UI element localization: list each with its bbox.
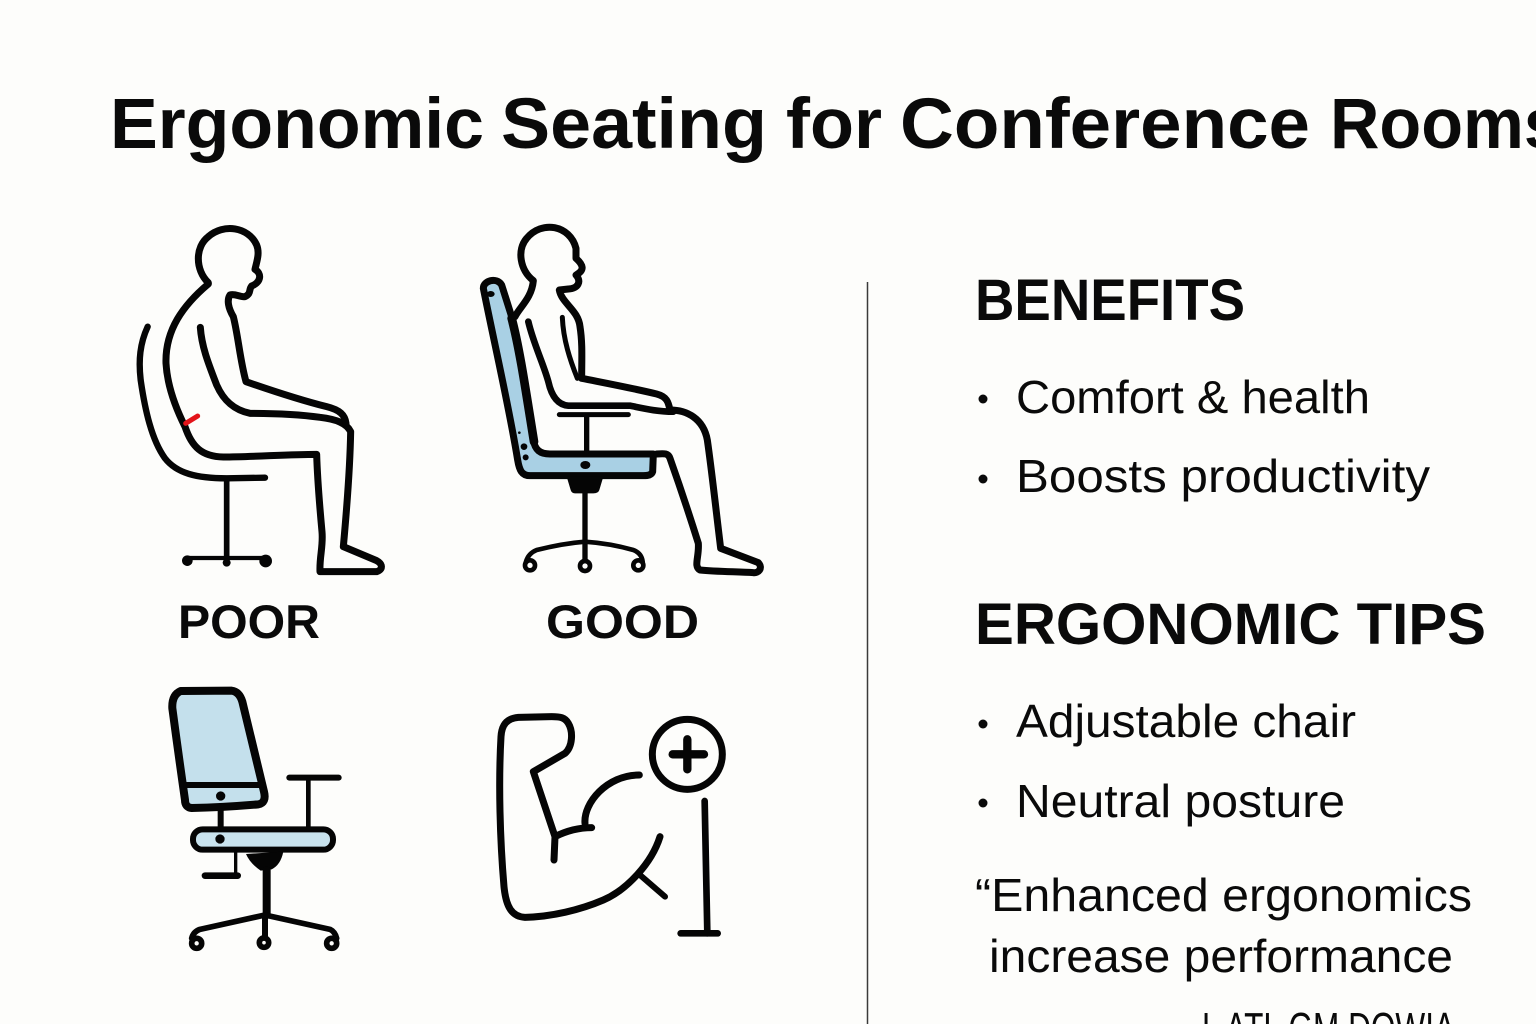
stand pole xyxy=(705,801,707,933)
poor chair base xyxy=(187,551,266,564)
heading: benefits: BENEFITS xyxy=(975,268,1245,333)
good figure outline xyxy=(515,227,760,573)
lower arm bar xyxy=(205,866,238,886)
red strain mark xyxy=(186,416,198,423)
poor figure head and arm outline xyxy=(198,229,346,423)
good chair column xyxy=(577,493,593,560)
arm stem xyxy=(301,780,315,827)
plus sign xyxy=(673,739,704,769)
bullet xyxy=(978,474,988,484)
chair backrest xyxy=(172,691,265,808)
chair casters xyxy=(192,938,337,948)
chair column xyxy=(255,870,279,915)
good figure arm and inner lines xyxy=(528,322,673,412)
chair post xyxy=(212,807,230,828)
good chair back and seat xyxy=(483,280,653,476)
poor chair stem xyxy=(218,480,235,563)
forearm tick xyxy=(640,875,665,897)
elbow crease xyxy=(554,837,555,860)
label: poor: POOR xyxy=(178,595,320,648)
good figure torso line xyxy=(562,317,577,378)
chair column lower xyxy=(256,915,274,937)
arm top xyxy=(289,769,339,787)
benefits list xyxy=(978,371,1430,502)
icon: adjustable office chair xyxy=(172,691,339,948)
bicep curve xyxy=(585,775,639,823)
icon: strong arm with plus xyxy=(500,717,722,933)
bullet xyxy=(978,394,988,404)
poor chair casters xyxy=(182,555,272,567)
chair hub xyxy=(246,852,283,871)
vertical divider xyxy=(866,282,868,1024)
backrest divider xyxy=(186,776,263,794)
icon: poor posture figure xyxy=(140,229,381,572)
title xyxy=(110,85,1536,164)
bicep crease xyxy=(555,828,592,837)
icon: good posture figure xyxy=(483,227,760,573)
item: chair: Adjustable chair xyxy=(1016,695,1356,747)
item: comfort: Comfort & health xyxy=(1016,371,1370,423)
chair back inner edge xyxy=(512,318,534,442)
lower arm stem xyxy=(231,852,241,874)
stand base xyxy=(681,923,718,943)
chair seat xyxy=(193,829,333,850)
backrest knob xyxy=(216,791,225,801)
heading: ergonomic tips: ERGONOMIC TIPS xyxy=(975,592,1486,657)
quote line 1: “Enhanced ergonomics xyxy=(975,869,1472,921)
item: productivity: Boosts productivity xyxy=(1016,450,1430,502)
chair base xyxy=(192,915,337,938)
poor figure body outline xyxy=(166,284,381,572)
quote line 2: increase performance xyxy=(989,930,1453,982)
title: Seating xyxy=(501,85,767,164)
good chair armrest xyxy=(559,407,628,422)
tips list xyxy=(978,695,1356,827)
poor chair back and seat xyxy=(140,327,265,478)
plus circle xyxy=(652,719,722,789)
title: Conference xyxy=(900,85,1310,164)
arm outline xyxy=(500,717,660,917)
title: Ergonomic xyxy=(110,85,484,164)
label: good: GOOD xyxy=(546,595,699,648)
seat knob xyxy=(215,834,225,844)
quote xyxy=(975,869,1472,1024)
bullet xyxy=(978,798,988,808)
good chair casters xyxy=(525,560,643,571)
good armrest stem xyxy=(579,417,595,452)
item: posture: Neutral posture xyxy=(1016,775,1345,827)
title: for xyxy=(786,85,882,164)
good chair hub xyxy=(567,477,603,493)
bullet xyxy=(978,720,988,728)
good chair adjustment dots xyxy=(487,291,590,469)
good chair base xyxy=(526,542,643,562)
